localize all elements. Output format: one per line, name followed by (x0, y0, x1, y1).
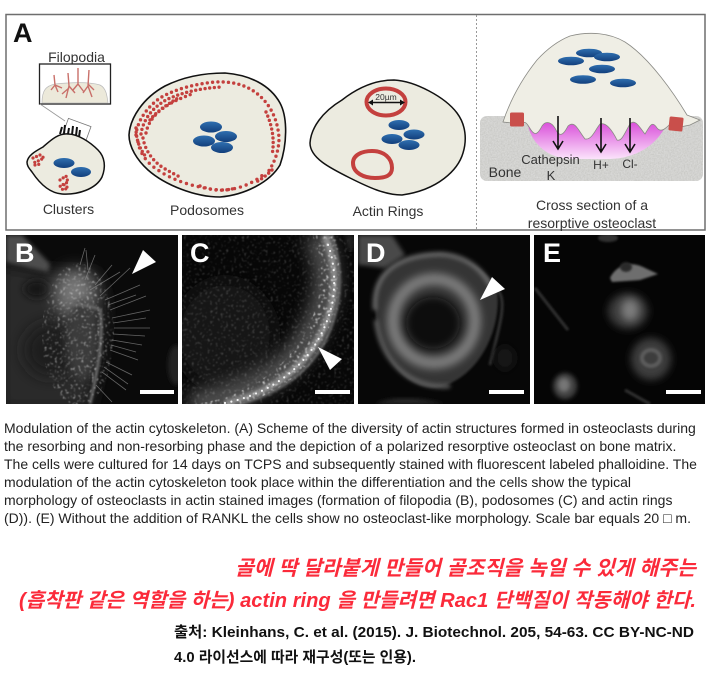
micrograph C: podosomes (175, 235, 354, 404)
scale bar (140, 390, 174, 394)
scale bar (315, 390, 350, 394)
cell: actin rings: Actin Rings (353, 203, 423, 219)
nuclei (576, 49, 602, 57)
resorptive osteoclast cross section: K (547, 168, 556, 183)
resorptive osteoclast cross section (480, 33, 703, 231)
resorptive osteoclast cross section: Bone (489, 164, 522, 180)
scale bar (666, 390, 701, 394)
scale bar (489, 390, 524, 394)
resorptive osteoclast cross section: Cross section of a (536, 197, 648, 213)
micrograph D: actin ring (358, 235, 530, 404)
dome (503, 33, 700, 140)
figure caption: the resorbing and non-resorbing phase and the depiction of a polarized resorptive osteoclast on bone matrix. (4, 438, 676, 454)
letter D: D (366, 238, 386, 268)
filopodia inset (40, 49, 110, 143)
bone (480, 116, 703, 181)
red highlighted statement (19, 557, 697, 612)
panel letter A: A (13, 18, 32, 48)
figure caption: morphology of osteoclasts in actin stained images (formation of filopodia (B), podosomes (C) and actin rings (4, 492, 672, 508)
figure caption: (D)). (E) Without the addition of RANKL the cells show no osteoclast-like morphology. Scale bar equals 20 □ m. (4, 510, 691, 526)
micrograph E: no RANKL (534, 234, 705, 404)
figure caption: Modulation of the actin cytoskeleton. (A) Scheme of the diversity of actin structures formed in osteoclasts during (4, 420, 696, 436)
arrowhead (480, 277, 505, 300)
cell: actin rings: 20µm (375, 92, 397, 102)
figure caption: The cells were cultured for 14 days on TCPS and subsequently stained with fluorescent labeled phalloidine. The (4, 456, 697, 472)
figure caption: modulation of the actin cytoskeleton took place within the differentiation and the cells show the typical (4, 474, 631, 490)
cell: podosomes (129, 73, 286, 218)
arrowhead (132, 250, 156, 274)
cell: actin rings (310, 80, 465, 219)
arrowhead (318, 347, 342, 370)
letter C: C (190, 238, 210, 268)
cell: clusters: Clusters (43, 201, 94, 217)
panel A: actin structure schematic (6, 14, 705, 231)
figure caption (4, 420, 697, 526)
resorptive osteoclast cross section: Cl- (622, 157, 638, 171)
resorptive osteoclast cross section: H+ (593, 158, 609, 172)
red highlighted statement: 골에 딱 달라붙게 만들어 골조직을 녹일 수 있게 해주는 (235, 557, 697, 580)
arrows (553, 116, 635, 152)
cell: podosomes: Podosomes (170, 202, 244, 218)
cell: clusters (27, 125, 104, 217)
micrograph B: filopodia (0, 235, 184, 410)
source credit (174, 624, 694, 666)
resorptive osteoclast cross section: resorptive osteoclast (528, 215, 656, 231)
letter B: B (15, 238, 34, 268)
source credit: 출처: Kleinhans, C. et al. (2015). J. Biotechnol. 205, 54-63. CC BY-NC-ND (174, 624, 694, 641)
source credit: 4.0 라이선스에 따라 재구성(또는 인용). (174, 649, 416, 666)
resorptive osteoclast cross section: Cathepsin (521, 152, 580, 167)
red highlighted statement: (흡착판 같은 역할을 하는) actin ring 을 만들려면 Rac1 단백질이 작동해야 한다. (19, 590, 696, 612)
letter E: E (543, 238, 561, 268)
filopodia inset: Filopodia (48, 49, 105, 65)
resorption lacuna (527, 118, 668, 159)
sealing zones (510, 112, 524, 126)
